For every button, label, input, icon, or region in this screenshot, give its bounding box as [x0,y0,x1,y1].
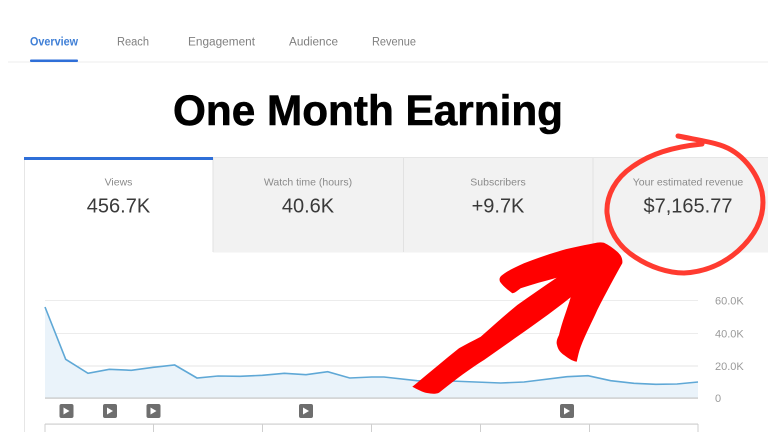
metric: views [87,176,151,218]
red hand-drawn circle [607,136,763,273]
video markers [60,404,574,418]
y axis labels: 40.0K [715,328,744,340]
y axis labels: 20.0K [715,361,744,373]
navigation tabs: Audience [289,36,338,48]
navigation tabs: Overview [30,36,78,48]
title: One Month Earning [173,87,563,135]
metric: views: 456.7K [87,196,151,218]
metric: watch time [264,176,352,218]
navigation tabs: Engagement [188,36,256,48]
metric: views: Views [105,176,132,188]
metric: estimated revenue [633,176,743,218]
metric: estimated revenue: Your estimated revenue [633,176,743,188]
metric: subscribers [470,176,526,218]
navigation tabs: Reach [117,36,149,48]
metric: watch time: Watch time (hours) [264,176,352,188]
y axis labels: 60.0K [715,296,744,308]
metric: subscribers: Subscribers [470,176,526,188]
y axis labels [715,296,744,405]
navigation tabs: Revenue [372,36,416,48]
metric tabs panel [24,157,768,432]
metric: watch time: 40.6K [282,196,335,218]
x axis [44,424,698,432]
navigation tabs [8,36,768,62]
metric: estimated revenue: $7,165.77 [644,196,732,218]
line chart [44,296,744,432]
red arrow [412,242,622,394]
metric: subscribers: +9.7K [472,196,525,218]
y axis labels: 0 [715,393,721,405]
